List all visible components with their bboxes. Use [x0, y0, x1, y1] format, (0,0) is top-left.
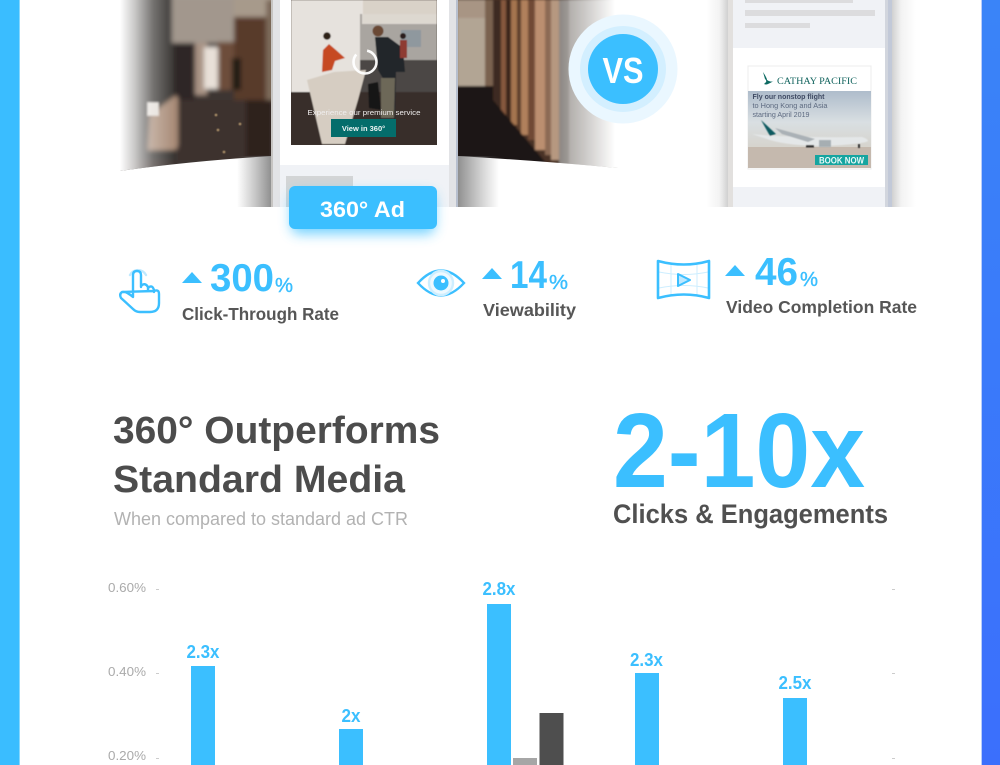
- banner headline: starting April 2019: [752, 112, 810, 119]
- bar group 3: [482, 579, 564, 765]
- gray content area: [280, 165, 449, 207]
- icon: tapping hand: [120, 270, 159, 312]
- book now button: BOOK NOW: [819, 156, 864, 166]
- 360 ad label button: [289, 186, 437, 234]
- 360 spinner: [354, 50, 376, 74]
- placeholder text lines: [745, 0, 875, 28]
- vs badge: [568, 14, 678, 124]
- banner logo: [763, 72, 774, 84]
- value: 300: [210, 257, 274, 300]
- bar chart: [108, 579, 895, 765]
- percent sign: %: [275, 275, 293, 297]
- label: Video Completion Rate: [726, 297, 917, 317]
- y axis labels: 0.20%: [108, 748, 146, 763]
- label: Viewability: [483, 300, 576, 320]
- floor lights: [215, 114, 241, 153]
- label: Click-Through Rate: [182, 304, 339, 324]
- view in 360 button: [331, 119, 396, 137]
- big stat caption: Clicks & Engagements: [613, 499, 888, 529]
- percent sign: %: [800, 269, 818, 291]
- metric: click-through rate: [120, 257, 339, 324]
- big stat: 2-10x: [613, 392, 865, 510]
- bar group 1: [186, 642, 220, 765]
- panorama photo right of phone: [458, 0, 618, 168]
- cathay pacific banner ad: [748, 66, 871, 169]
- bar group 5: 2.5x: [778, 673, 812, 693]
- y axis labels: 0.40%: [108, 664, 146, 679]
- banner headline: [752, 94, 828, 119]
- bar group 4: 2.3x: [630, 650, 663, 670]
- airplane: [752, 120, 868, 148]
- vs badge: VS: [602, 50, 644, 91]
- heading: [113, 410, 440, 501]
- bar group 2: [339, 706, 363, 765]
- phone: 360 ad: [271, 0, 458, 207]
- metric: video completion rate: [658, 251, 917, 317]
- bar group 2: 2x: [342, 706, 360, 726]
- banner headline: Fly our nonstop flight: [752, 94, 825, 101]
- 360 ad label button: 360° Ad: [320, 197, 405, 222]
- left blue side band: [0, 0, 20, 765]
- banner brand name: CATHAY PACIFIC: [777, 77, 857, 87]
- up arrow: [725, 265, 745, 276]
- subheading: When compared to standard ad CTR: [114, 509, 408, 529]
- percent sign: %: [549, 272, 568, 294]
- value: 46: [755, 251, 798, 294]
- bar group 1: 2.3x: [186, 642, 220, 662]
- up arrow: [182, 272, 202, 283]
- view in 360 button: View in 360°: [342, 124, 385, 133]
- icon: panoramic video: [658, 261, 709, 298]
- metric: viewability: [418, 254, 576, 320]
- y axis labels: 0.60%: [108, 580, 146, 595]
- up arrow: [482, 268, 502, 279]
- ad caption: Experience our premium service: [308, 108, 420, 117]
- y axis labels: [108, 580, 146, 763]
- heading: Standard Media: [113, 459, 406, 501]
- window reflection: [147, 102, 159, 116]
- bar group 5: [778, 673, 812, 765]
- right blue side band: [981, 0, 1000, 765]
- bar group 3: 2.8x: [482, 579, 516, 599]
- 360 ad creative photo: [291, 0, 437, 145]
- phone: standard ad: [706, 0, 916, 207]
- banner photo: [748, 91, 871, 148]
- shadows beside 360 ad phone: [237, 156, 499, 207]
- panorama photo left of phone: [120, 0, 271, 171]
- gray placeholder block: [286, 176, 353, 207]
- heading: 360° Outperforms: [113, 410, 440, 452]
- bar group 4: [630, 650, 663, 765]
- banner headline: to Hong Kong and Asia: [752, 103, 828, 110]
- icon: eye: [418, 270, 464, 296]
- value: 14: [510, 254, 547, 297]
